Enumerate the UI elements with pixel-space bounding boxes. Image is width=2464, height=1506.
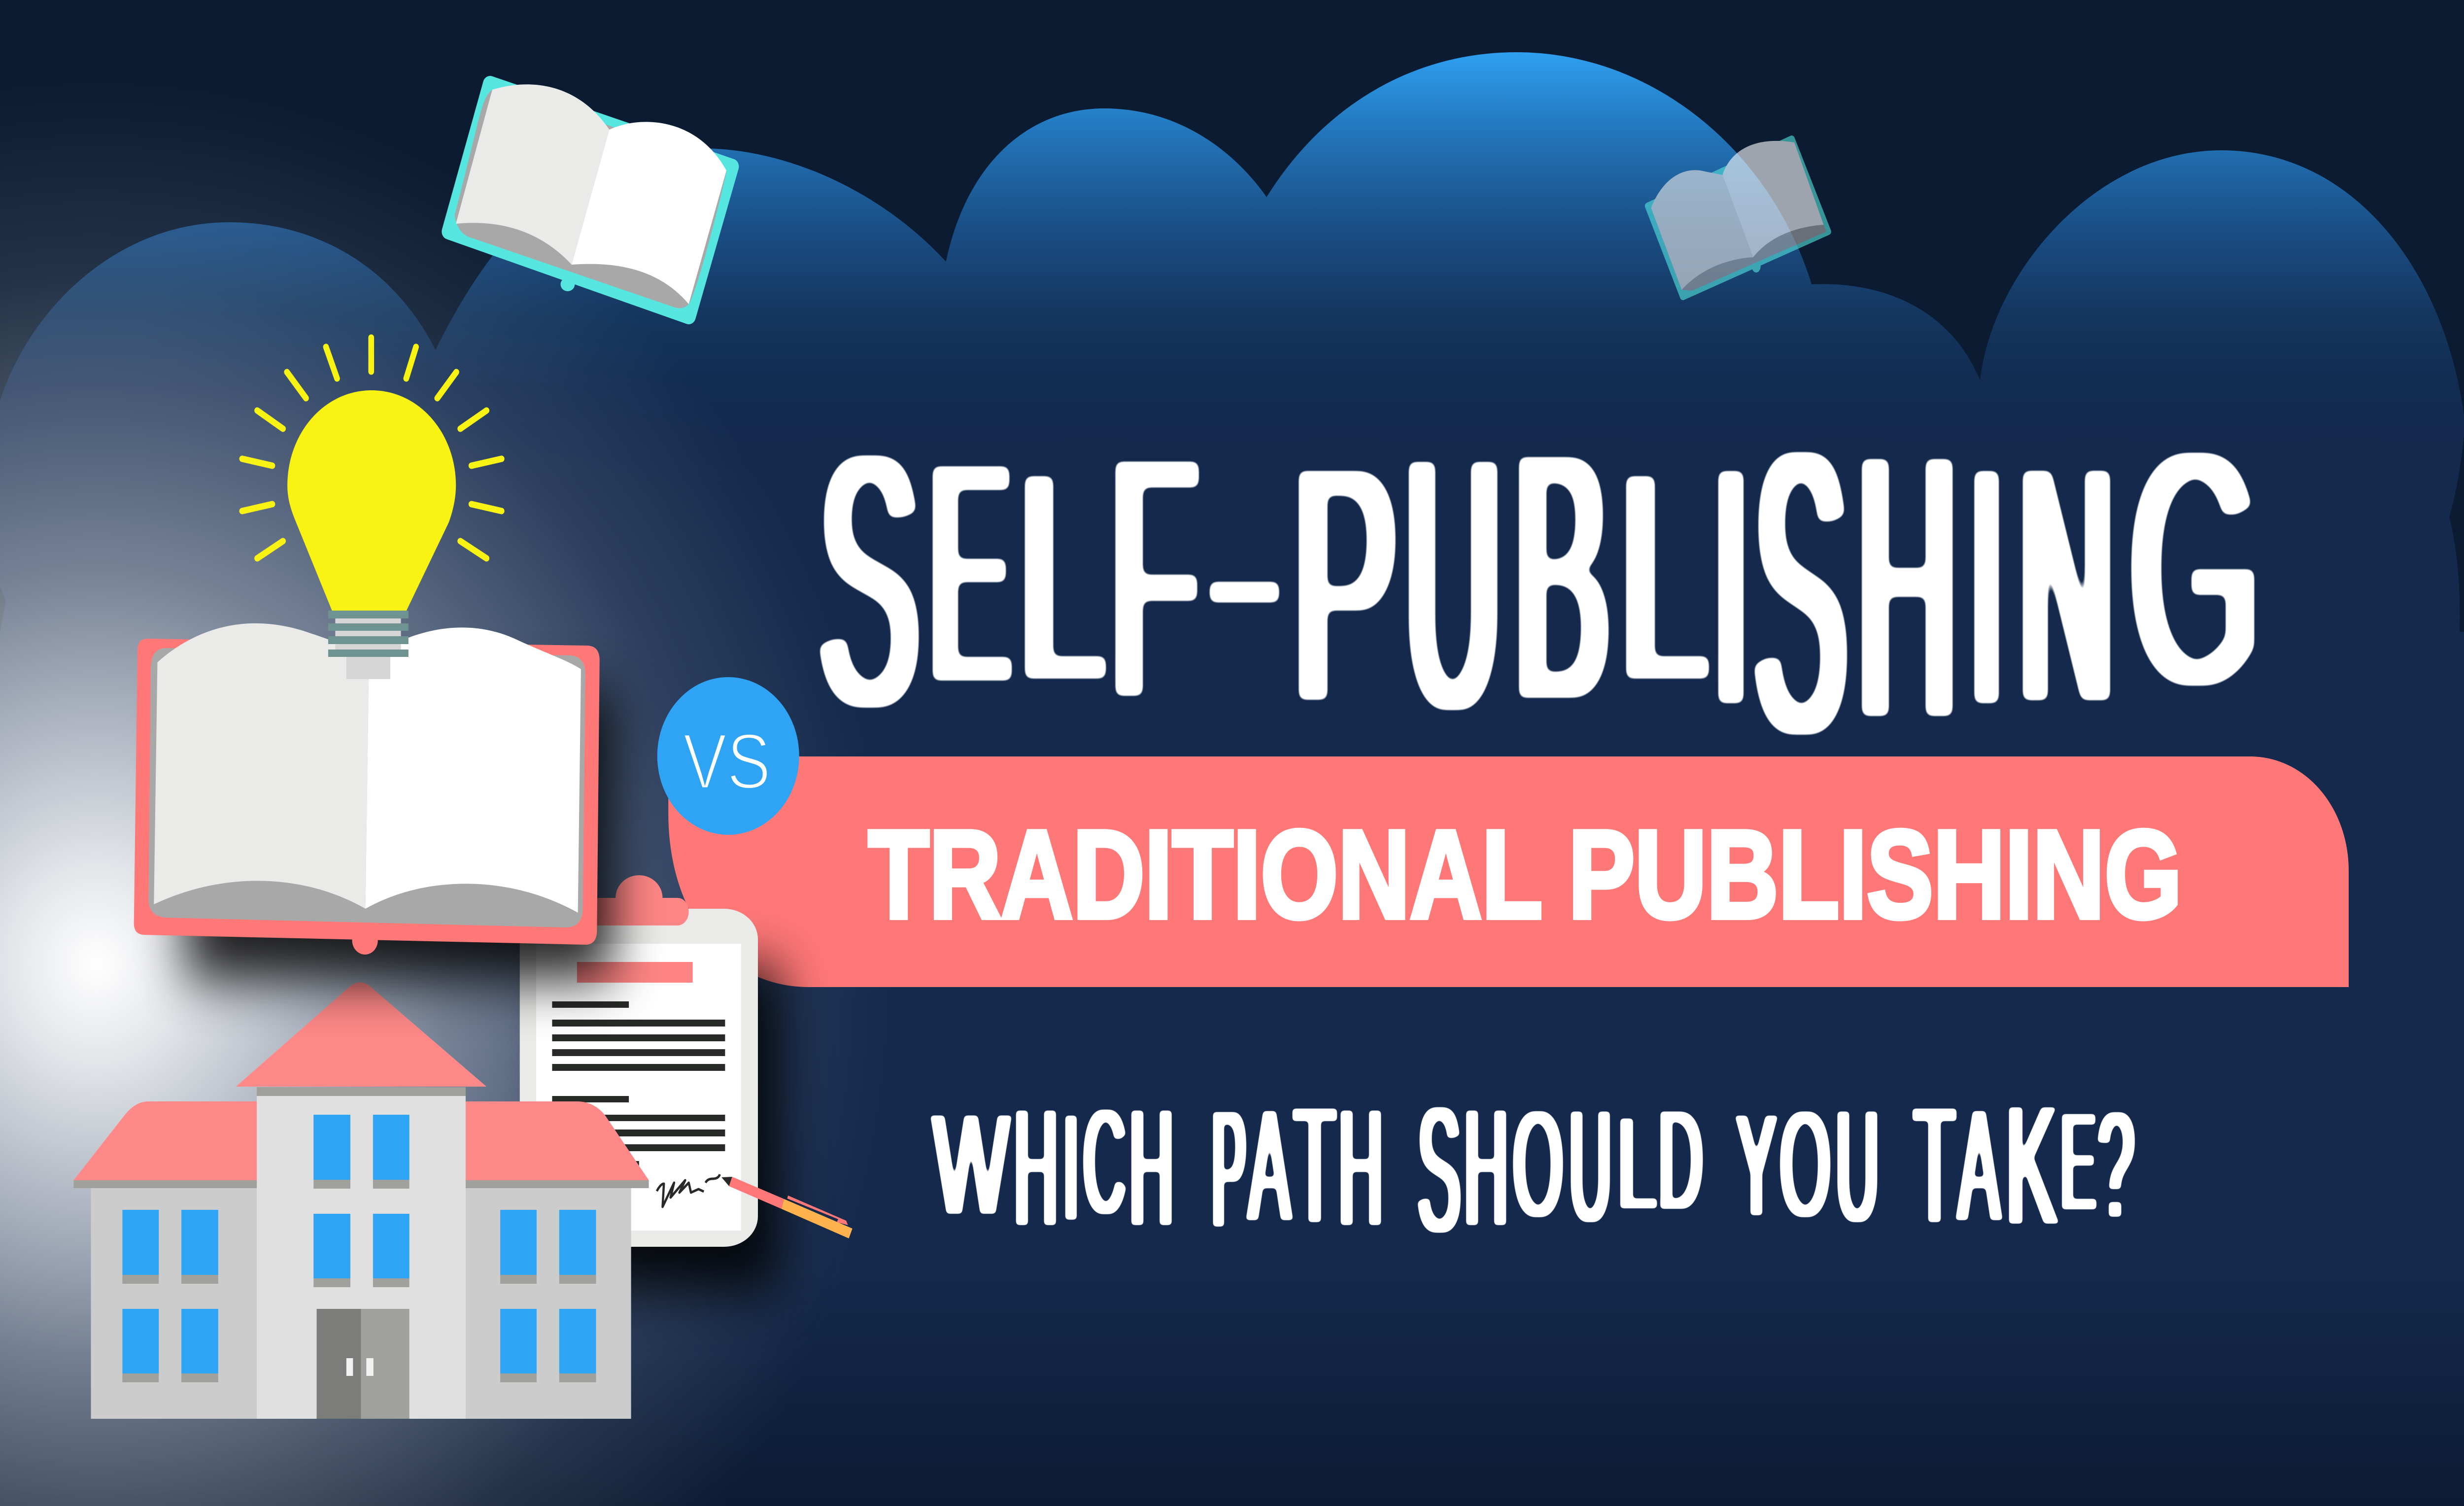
main title: S [1755, 370, 1846, 816]
board [520, 909, 758, 1247]
main title: E [930, 399, 1010, 747]
tab [1752, 260, 1761, 273]
wings [91, 1188, 631, 1419]
text: ? [2098, 1082, 2134, 1249]
subtitle question: U [1836, 1077, 1879, 1254]
ribbon [668, 756, 2349, 987]
subtitle question: O [1780, 1081, 1830, 1248]
subtitle question: P [1212, 1076, 1246, 1263]
subtitle question: H [1465, 1075, 1508, 1261]
small teal book [449, 84, 732, 316]
right page [1722, 141, 1824, 257]
pen [721, 1177, 853, 1238]
cover [449, 84, 732, 316]
subtitle question: A [1249, 1077, 1291, 1254]
main title: B [1514, 382, 1609, 772]
subtitle question: W [933, 1085, 1010, 1244]
building [73, 983, 649, 1419]
main title: F [1111, 388, 1198, 768]
subtitle question: D [1659, 1081, 1703, 1239]
cover [134, 639, 600, 945]
subtitle question: S [1418, 1070, 1460, 1269]
right wing roof [466, 1101, 649, 1180]
eaves [73, 1180, 649, 1188]
main title: G [2130, 385, 2259, 753]
main title: L [1620, 413, 1707, 741]
subtitle question: K [2006, 1071, 2057, 1260]
clipboard [520, 875, 758, 1247]
subtitle question: T [1914, 1073, 1955, 1257]
left wing roof [73, 1101, 257, 1180]
windows [122, 1115, 596, 1373]
light rays [242, 338, 502, 558]
large open book [134, 623, 600, 955]
cover tab [352, 926, 378, 955]
subtitle question: E [2061, 1084, 2095, 1239]
paper [536, 944, 741, 1231]
signature [657, 1174, 720, 1207]
bulb base [328, 611, 409, 679]
subtitle question: C [1084, 1080, 1125, 1244]
document lines [552, 1001, 725, 1169]
clipboard shadow [559, 966, 781, 1291]
VS badge [657, 677, 799, 835]
large book shadow [186, 690, 612, 981]
subtitle question: H [1339, 1075, 1383, 1261]
door [317, 1309, 410, 1419]
tab [561, 277, 575, 291]
main title: P [1293, 399, 1397, 771]
main roof [236, 983, 486, 1087]
left page [456, 84, 610, 265]
page block [454, 90, 726, 308]
subtitle question: L [1618, 1091, 1656, 1236]
light bulb [242, 338, 502, 679]
subtitle question: A [1958, 1077, 2000, 1254]
subtitle question: Y [1737, 1085, 1776, 1246]
subtitle question: H [1129, 1075, 1173, 1261]
subtitle question: T [1294, 1073, 1335, 1257]
main title: I [1971, 398, 2002, 775]
main title: U [1406, 384, 1500, 782]
cover [1648, 139, 1828, 297]
main title: I [1714, 398, 1747, 775]
right page [572, 122, 726, 304]
clip [588, 875, 689, 925]
VS badge: VS [683, 718, 771, 806]
tower eave [257, 1087, 466, 1096]
subtitle question: U [1570, 1077, 1611, 1254]
main title: - [1207, 422, 1282, 719]
left page [1651, 170, 1753, 290]
page block [1651, 142, 1826, 291]
main title: N [2019, 399, 2114, 771]
main title: H [1858, 378, 1956, 795]
window sills [122, 1180, 596, 1382]
subtitle question: I [1063, 1083, 1079, 1252]
page block [148, 648, 585, 927]
paper header [577, 962, 693, 983]
subtitle question: H [1014, 1075, 1058, 1261]
right page [366, 627, 581, 913]
bulb glass [287, 390, 456, 611]
white glow [0, 0, 931, 1506]
left page [154, 623, 369, 909]
tower [257, 1096, 466, 1419]
subtitle question: O [1513, 1081, 1563, 1248]
ribbon heading: TRADITIONAL PUBLISHING [868, 805, 2182, 945]
faded teal book [1648, 139, 1828, 297]
main title: L [1020, 413, 1104, 741]
main title: S [820, 381, 919, 780]
